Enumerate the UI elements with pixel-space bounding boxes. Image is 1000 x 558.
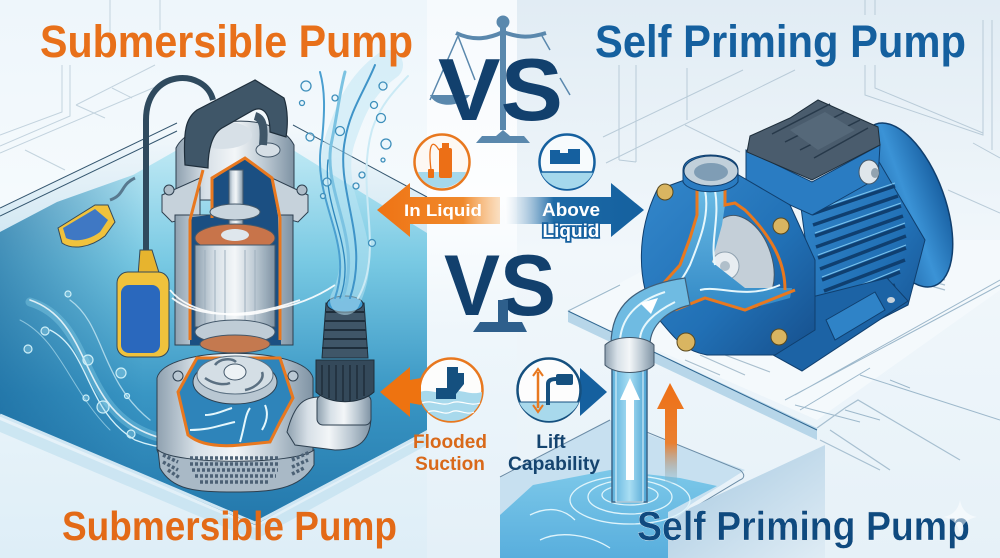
discharge coupling [316, 360, 374, 402]
cable gland [859, 160, 879, 184]
silver impeller disc [699, 207, 785, 317]
wave lines around pump [170, 285, 335, 315]
icon: flooded suction [420, 358, 482, 422]
upper cutaway [190, 158, 281, 345]
elbow [287, 397, 371, 450]
lower cutaway chamber [178, 358, 293, 446]
arrow: above liquid: Above [542, 200, 600, 220]
water flow in channel [650, 190, 780, 305]
lower wedge wall [668, 445, 825, 558]
self priming: floor slab [568, 240, 1000, 470]
lower body [157, 353, 313, 480]
submersible pump [117, 78, 374, 492]
swirl in chamber [190, 405, 267, 442]
title: Submersible Pump top: Submersible Pump [40, 16, 413, 67]
white flow arrow [620, 378, 640, 480]
label: flooded suction: Suction [415, 454, 485, 475]
icon: above liquid [540, 134, 594, 190]
tank lower edge [0, 415, 427, 523]
cutaway orange outline [662, 183, 795, 310]
background: right half [500, 0, 1000, 558]
water jet [320, 65, 408, 300]
arrow: above liquid: Liquid [542, 221, 600, 241]
vertical pipe [612, 368, 647, 502]
tank rim lines [0, 123, 427, 216]
arrow: above liquid [505, 183, 644, 241]
large float switch [117, 250, 169, 357]
shaft [229, 170, 243, 230]
self priming: suction pool [500, 418, 825, 558]
heading: VS top: VS [438, 40, 563, 139]
bubbles: left water [24, 291, 135, 438]
label: lift capability: Lift [536, 432, 566, 453]
bolts [657, 184, 789, 351]
upper body dome [176, 121, 294, 200]
self priming pump [605, 100, 972, 502]
label: flooded suction: Flooded [413, 432, 487, 453]
icon: in liquid [414, 134, 470, 190]
icon: balance scales [430, 17, 570, 143]
icon: lift capability [518, 358, 607, 422]
arrow: in liquid: In Liquid [404, 201, 482, 220]
curved suction pipe [611, 278, 690, 345]
swirling inflow [20, 300, 230, 448]
hatch shadow [685, 265, 945, 375]
power cord [146, 78, 213, 250]
terminal box lid [747, 100, 880, 180]
arrow: in liquid [377, 183, 500, 237]
motor end cap [838, 111, 972, 299]
heading: VS lower: VS [444, 238, 556, 334]
motor housing [175, 215, 293, 345]
arrow: lift height [657, 383, 684, 483]
label: lift capability [508, 432, 600, 475]
title: Self Priming Pump bottom: Self Priming Pump [637, 503, 970, 549]
volute body [641, 170, 815, 355]
arrow: flooded suction [380, 367, 421, 417]
title: Self Priming Pump top: Self Priming Pump [595, 16, 966, 67]
bubbles: jet [300, 81, 391, 246]
blueprint lines: right [603, 0, 1000, 213]
flange [162, 178, 308, 222]
motor fins [812, 186, 906, 313]
cutaway water channel [650, 183, 792, 318]
background: left half [0, 0, 430, 558]
scale base lower [473, 300, 527, 332]
inlet port [683, 155, 738, 192]
label: lift capability: Capability [508, 454, 600, 475]
small float switch [58, 178, 135, 247]
background: centre column [427, 0, 517, 558]
motor core [195, 224, 275, 252]
watermark sparkle [943, 500, 977, 534]
corrugated hose [322, 303, 368, 358]
handle [184, 80, 287, 168]
title: Submersible Pump bottom: Submersible Pump [62, 503, 397, 549]
panel: submersible water tank [0, 123, 427, 540]
foot [773, 278, 908, 371]
strainer [158, 450, 314, 492]
pool water [500, 470, 717, 558]
pipe collar [605, 338, 654, 372]
tank water [0, 150, 427, 525]
motor finned body [800, 160, 925, 350]
blueprint lines: left [0, 0, 160, 170]
tank rim [0, 123, 427, 245]
label: flooded suction [413, 432, 487, 475]
terminal box base [746, 145, 880, 215]
impeller [193, 356, 277, 404]
ripples [530, 476, 690, 548]
